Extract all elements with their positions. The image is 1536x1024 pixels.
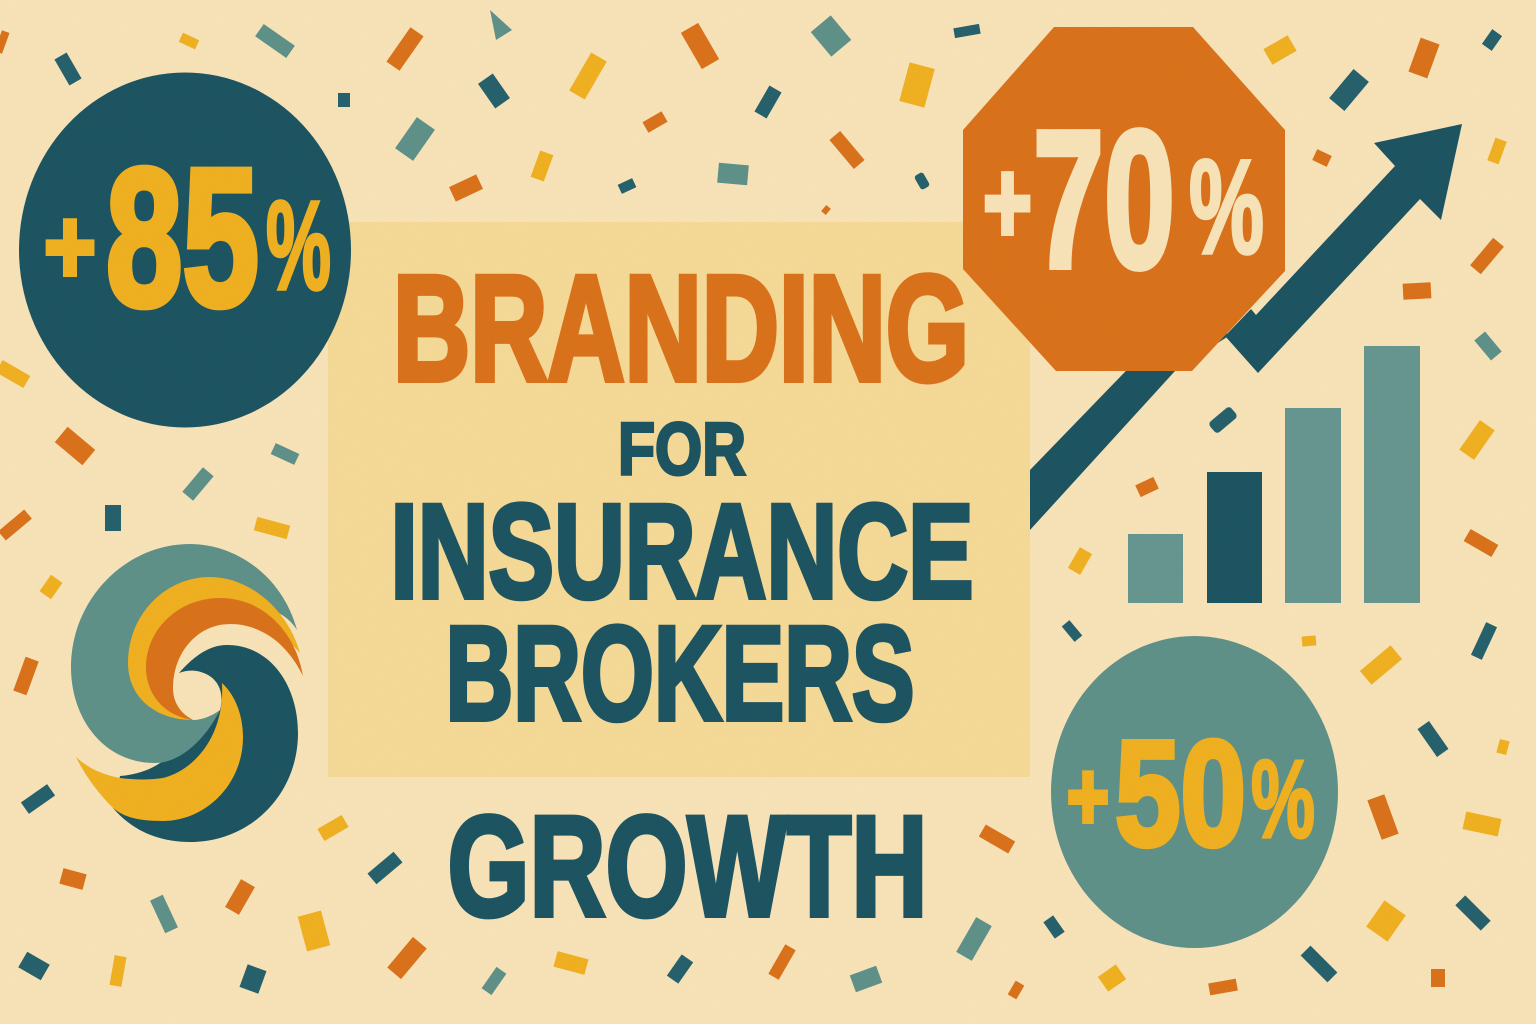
stat badge: +85% dark circle: %: [266, 175, 331, 316]
swirl: yellow lower blade: [76, 683, 243, 821]
title: BRANDING: BRANDING: [393, 244, 969, 412]
stat badge: +85% dark circle: +: [44, 188, 96, 306]
stat badge: +50% teal circle: [1051, 636, 1338, 948]
bar 2: [1207, 472, 1262, 603]
stat badge: +50% teal circle: 50: [1115, 709, 1246, 877]
stat badge: +70% orange octagon: 70: [1033, 90, 1175, 309]
stat badge: +70% orange octagon: +: [983, 137, 1032, 269]
stat badge: +50% teal circle: +: [1067, 743, 1109, 850]
stat badge: +70% orange octagon: [963, 27, 1285, 371]
icon: swirl logo: [71, 544, 303, 842]
swirl: yellow upper blade: [128, 577, 300, 720]
bar chart: [1128, 346, 1420, 603]
panel: central title backdrop: [328, 222, 1030, 777]
bar 3: [1285, 408, 1341, 603]
title: INSURANCE: INSURANCE: [390, 478, 974, 626]
title: GROWTH: GROWTH: [448, 788, 928, 946]
swirl: dark teal lower blade: [113, 645, 298, 842]
stat badge: +85% dark circle: 85: [106, 128, 259, 347]
bar 1: [1128, 534, 1183, 603]
stat badge: +70% orange octagon: %: [1189, 133, 1264, 282]
title: FOR: FOR: [618, 408, 746, 490]
stat badge: +85% dark circle: [19, 72, 351, 428]
stat badge: +50% teal circle: %: [1251, 738, 1315, 861]
bar 4: [1364, 346, 1420, 603]
icon: growth arrow: [1030, 124, 1462, 530]
title: BROKERS: BROKERS: [446, 600, 914, 748]
swirl: orange inner blade: [146, 598, 303, 720]
swirl: teal upper blade: [71, 544, 297, 763]
